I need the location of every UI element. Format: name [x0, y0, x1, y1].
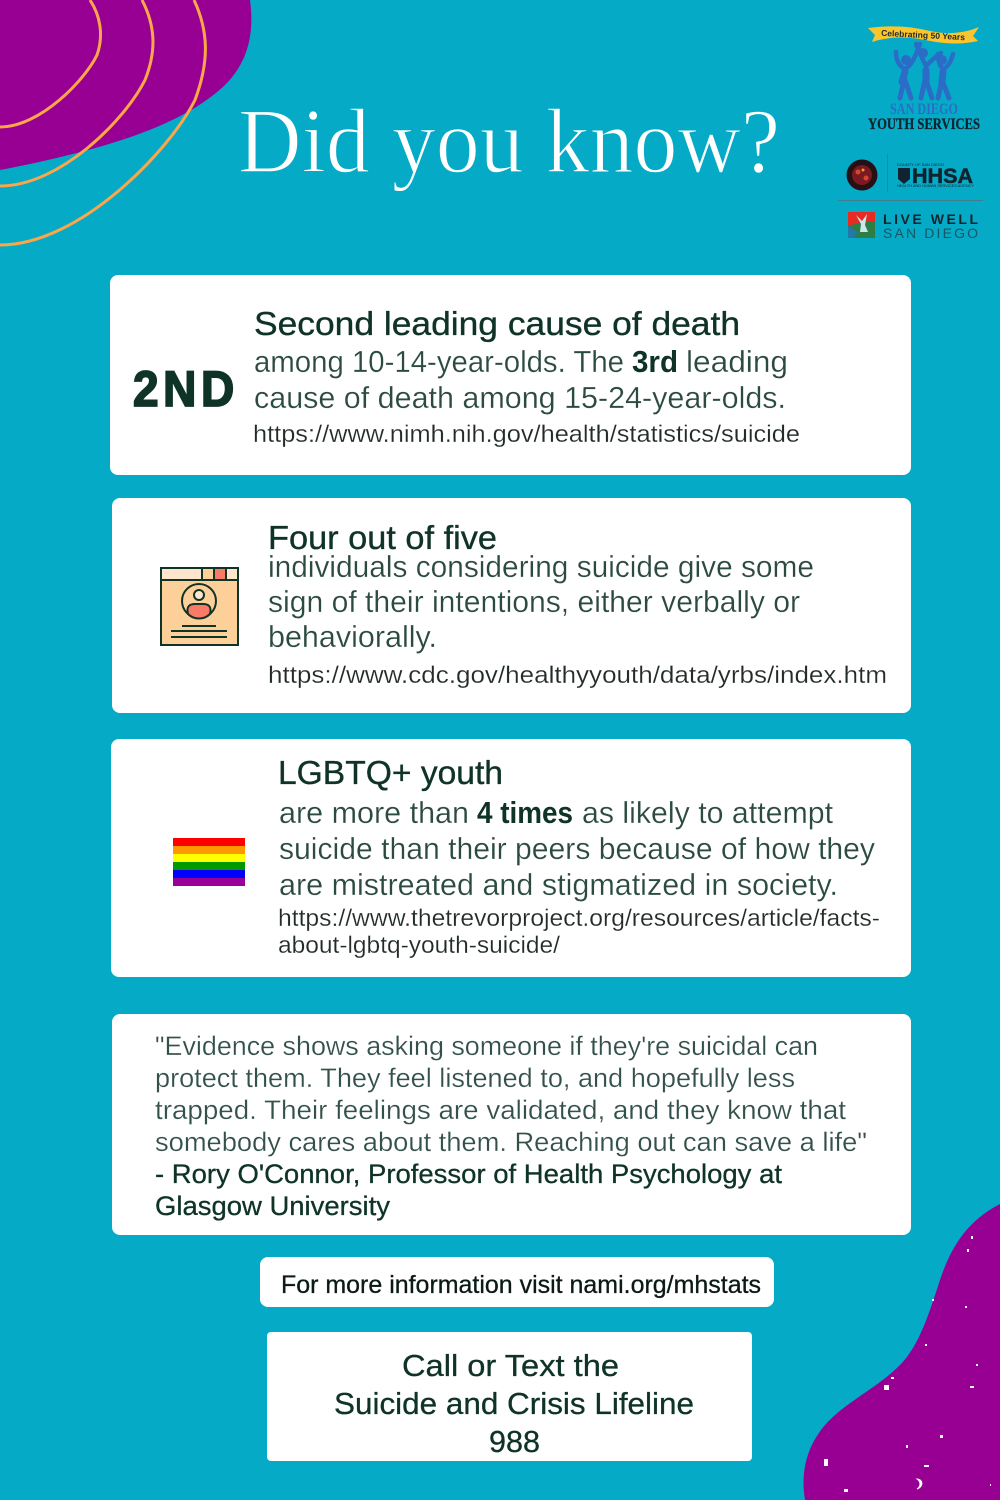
quote text: [155, 1031, 867, 1157]
icon: live well figure: [848, 212, 875, 238]
logo: County of San Diego HHSA: HHSA: [912, 165, 973, 188]
icon: rainbow flag: [173, 838, 245, 886]
body text: cause of death among 15-24-year-olds.: [254, 380, 786, 415]
quote attribution: - Rory O'Connor, Professor of Health Psychology at: [155, 1159, 782, 1189]
quote attribution: [155, 1159, 782, 1221]
heading: Second leading cause of death: [254, 305, 740, 342]
banner: Celebrating 50 Years: Celebrating 50 Years: [881, 28, 966, 42]
body text: sign of their intentions, either verbally or: [268, 584, 800, 619]
source link: https://www.cdc.gov/healthyyouth/data/yrbs/index.htm: [268, 662, 887, 689]
icon: profile window: [161, 568, 238, 645]
logo: Live Well San Diego: SAN DIEGO: [883, 225, 978, 241]
panel: crisis lifeline: Suicide and Crisis Lifeline: [334, 1386, 694, 1421]
source link: [278, 905, 880, 959]
source link: about-lgbtq-youth-suicide/: [278, 932, 560, 959]
body text: 3rd: [632, 344, 678, 379]
panel: more information: [260, 1257, 774, 1307]
quote attribution: Glasgow University: [155, 1191, 390, 1221]
icon: three raised-arm figures: [896, 44, 953, 98]
body text: among 10-14-year-olds. The: [254, 344, 624, 379]
decorative blob: top left: [0, 0, 251, 245]
body text: leading: [686, 344, 788, 379]
body text: as likely to attempt: [582, 795, 833, 830]
logo: Live Well San Diego: LIVE WELL: [883, 211, 978, 227]
body text: [254, 344, 788, 415]
source link: https://www.thetrevorproject.org/resources/article/facts-: [278, 905, 880, 932]
logo: County of San Diego HHSA: COUNTY OF SAN DIEGO: [897, 162, 944, 167]
logo: San Diego Youth Services: [868, 26, 980, 133]
logo: County of San Diego HHSA: HEALTH AND HUMAN SERVICES AGENCY: [897, 183, 974, 188]
source link: https://www.nimh.nih.gov/health/statistics/suicide: [253, 421, 800, 448]
panel: crisis lifeline: [267, 1332, 752, 1461]
quote text: "Evidence shows asking someone if they're suicidal can: [155, 1031, 818, 1061]
body text: [279, 795, 875, 902]
body text: individuals considering suicide give some: [268, 549, 814, 584]
body text: [268, 549, 814, 654]
quote text: trapped. Their feelings are validated, and they know that: [155, 1095, 847, 1125]
panel: four out of five: [112, 498, 911, 713]
logo: San Diego Youth Services: SAN DIEGO: [890, 101, 958, 118]
icon: county seal: [846, 160, 878, 190]
heading: LGBTQ+ youth: [278, 754, 503, 791]
quote text: protect them. They feel listened to, and hopefully less: [155, 1063, 795, 1093]
panel: crisis lifeline: Call or Text the: [402, 1348, 619, 1383]
body text: 4 times: [477, 795, 573, 830]
decorative blob: bottom right: [804, 1204, 1000, 1500]
body text: behaviorally.: [268, 619, 437, 654]
heading: Four out of five: [268, 519, 497, 556]
logo: County of San Diego HHSA: [846, 154, 974, 192]
body text: are mistreated and stigmatized in society.: [279, 867, 838, 902]
logo: Live Well San Diego: [848, 211, 978, 241]
panel: quote: [112, 1014, 911, 1235]
panel: LGBTQ+ youth: [111, 739, 911, 977]
panel: more information: For more information visit nami.org/mhstats: [281, 1271, 761, 1299]
body text: suicide than their peers because of how they: [279, 831, 875, 866]
stat: 2ND: 2ND: [133, 362, 234, 417]
title: Did you know?: [238, 90, 780, 192]
body text: are more than: [279, 795, 469, 830]
panel: second leading cause: [110, 275, 911, 475]
quote text: somebody cares about them. Reaching out can save a life": [155, 1127, 867, 1157]
panel: crisis lifeline: 988: [489, 1424, 540, 1459]
